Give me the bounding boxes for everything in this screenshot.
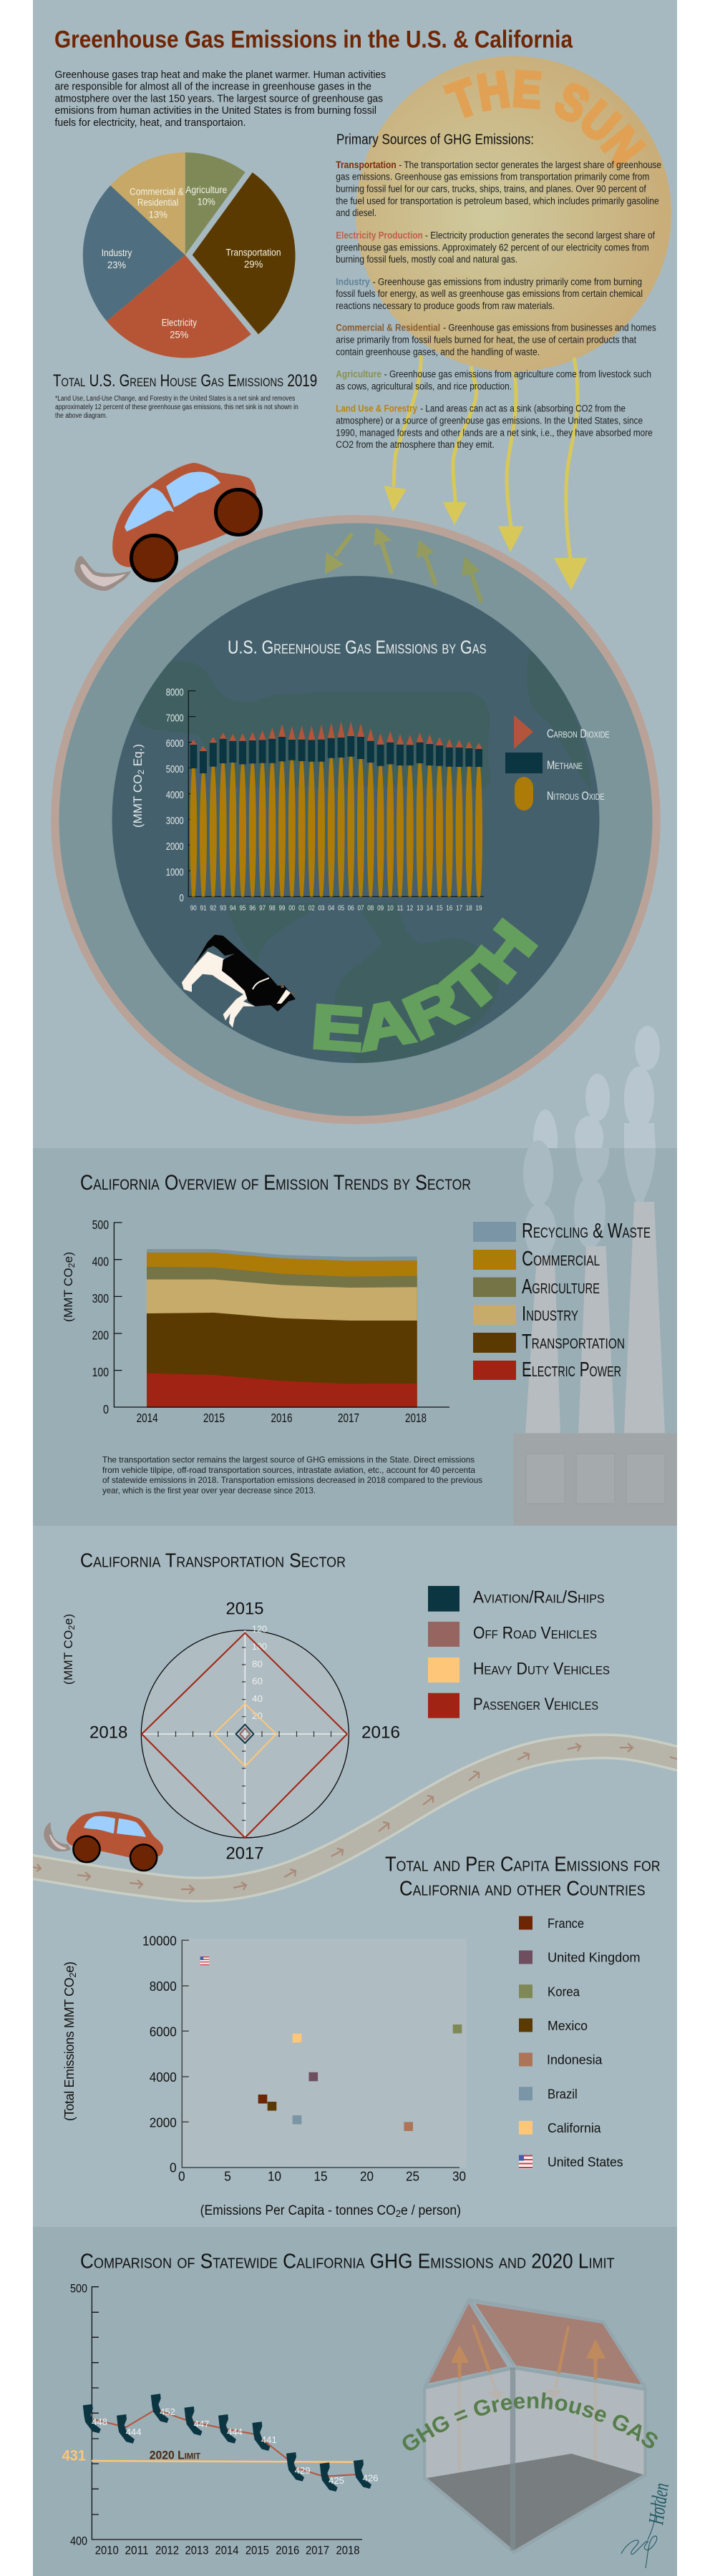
scatter plot: emissions vs per capita	[62, 1934, 467, 2219]
title: Greenhouse Gas Emissions in the U.S. & California	[54, 26, 573, 53]
car wheels	[73, 1836, 100, 1862]
text block: transportation trend: year, which is the first year over year decrease since 2013.	[102, 1485, 316, 1495]
year labels: 2016	[361, 1723, 400, 1742]
axis values: 200	[92, 1328, 109, 1343]
area: transportation	[147, 1313, 417, 1408]
axis values: 2018	[405, 1411, 427, 1425]
axis values: 2015	[203, 1411, 225, 1425]
pie labels: 10%	[198, 196, 215, 207]
text block: commercial and residential source: - Greenhouse gas emissions from businesses and homes	[443, 323, 656, 333]
data values: 444	[126, 2427, 142, 2437]
axes	[92, 2287, 362, 2540]
pie labels: Electricity	[162, 318, 197, 328]
x axis years: 93	[220, 904, 226, 913]
legend: countries: France	[548, 1916, 584, 1931]
radial scale values: 60	[252, 1675, 263, 1687]
heading: california overview: California Overview of Emission Trends by Sector	[80, 1171, 471, 1195]
year labels: 2017	[226, 1843, 263, 1863]
year labels	[89, 1600, 400, 1863]
y axis values: 6000	[166, 738, 184, 750]
continents	[136, 652, 590, 1063]
illustration: earth	[51, 515, 661, 1125]
text block: commercial and residential source: Commercial & Residential	[336, 323, 440, 333]
data values: 441	[261, 2435, 277, 2445]
panel: statewide comparison background	[33, 2227, 677, 2576]
text block: electricity source: - Electricity production generates the second largest share of	[425, 230, 655, 240]
x axis years: 16	[446, 904, 452, 913]
intro text block: fuels for electricity, heat, and transportaion.	[54, 117, 246, 129]
roof	[428, 2303, 507, 2384]
y axis values: 4000	[166, 789, 184, 801]
pie labels: Transportation	[226, 248, 281, 258]
slice: industry	[83, 185, 185, 321]
intro text block: are responsible for almost all of the increase in greenhouse gases in the	[54, 82, 371, 93]
greenhouse gas label: GHG = Greenhouse GAS	[402, 2392, 658, 2451]
x axis years: 17	[456, 904, 462, 913]
text block: industry source: - Greenhouse gas emissions from industry primarily come from burning	[373, 276, 642, 287]
text block: agriculture source	[336, 369, 651, 392]
pie labels: 23%	[107, 260, 126, 270]
axis values: 2016	[276, 2543, 299, 2557]
pie labels: 29%	[244, 259, 263, 270]
legend: sectors	[473, 1220, 651, 1381]
axis values: 500	[92, 1218, 109, 1232]
axis values: 2012	[155, 2543, 179, 2557]
x axis years: 09	[377, 904, 384, 913]
data markers	[200, 1957, 462, 2131]
text block: land use and forestry source: atmosphere) or a source of greenhouse gas emissions. In the United States, since	[336, 415, 643, 426]
text block: land use and forestry source: 1990, managed forests and other lands are a net sink, i.e., they have absorbed more	[336, 427, 653, 438]
car windows	[84, 1816, 115, 1833]
limit value: 431	[62, 2447, 86, 2464]
slice: commercial and residential	[110, 152, 185, 255]
text block: electricity source: greenhouse gas emissions. Approximately 62 percent of our electricity comes from	[336, 242, 649, 253]
axis values	[142, 1934, 466, 2183]
axis values: 6000	[150, 2024, 177, 2039]
y axis label: e)	[62, 1252, 75, 1263]
signature: Holden	[644, 2482, 673, 2527]
illustration: greenhouse	[424, 2300, 646, 2552]
axis values: 2017	[338, 1411, 359, 1425]
heading: total and per capita emissions: Total and Per Capita Emissions for	[385, 1853, 660, 1876]
footnote: *Land Use, Land-Use Change, and Forestry in the United States is a net sink and removes	[55, 395, 295, 403]
radial scale values: 120	[252, 1624, 267, 1635]
illustration: cow	[182, 935, 296, 1028]
radar chart: transportation emissions	[62, 1600, 400, 1863]
legend: sectors: Industry	[522, 1303, 578, 1326]
y axis title: 2	[67, 1972, 78, 1978]
illustration: car on road	[44, 1811, 163, 1871]
axis values: 2000	[150, 2115, 177, 2130]
axis values: 2015	[245, 2543, 269, 2557]
text block: electricity source: Electricity Production	[336, 230, 423, 240]
intro text block: atmostphere over the last 150 years. The largest source of greenhouse gas	[54, 93, 383, 104]
y axis title: (Total Emissions MMT CO	[62, 1977, 77, 2121]
marker: united states flag	[200, 1957, 209, 1965]
legend: sectors: Electric Power	[522, 1358, 621, 1381]
text block: land use and forestry source: CO2 from the atmosphere than they emit.	[336, 439, 495, 450]
slice: agriculture	[185, 152, 245, 255]
axis values: 2014	[215, 2543, 239, 2557]
text block: transportation trend: from vehicle tilpipe, off-road transportation sources, intrastate aviation, etc., account for 40 percenta	[102, 1465, 475, 1475]
heading: statewide comparison: Comparison of Statewide California GHG Emissions and 2020 Limit	[80, 2251, 615, 2273]
signature	[621, 2482, 673, 2568]
text block: transportation source: and diesel.	[336, 207, 376, 218]
text block: land use and forestry source: - Land areas can act as a sink (absorbing CO2 from the	[420, 403, 626, 414]
x axis years: 05	[338, 904, 344, 913]
axis values: 8000	[150, 1979, 177, 1994]
plot background	[182, 1939, 467, 2168]
pie labels: Residential	[137, 197, 178, 207]
x axis years: 10	[387, 904, 394, 913]
text block: transportation trend	[102, 1455, 482, 1495]
text block: commercial and residential source: arise primarily from fossil fuels burned for heat, the use of certain products that	[336, 335, 636, 346]
text block: commercial and residential source	[336, 323, 656, 358]
x axis years: 02	[308, 904, 315, 913]
bars: nitrous oxide	[190, 751, 482, 903]
illustration: the sun	[356, 56, 671, 372]
x axis years: 91	[200, 904, 207, 913]
axis values: 2017	[306, 2543, 329, 2557]
radial scale values: 20	[252, 1710, 263, 1721]
x axis years: 14	[427, 904, 433, 913]
axis values: 15	[313, 2169, 328, 2183]
data values: 447	[193, 2419, 210, 2429]
axis values: 300	[92, 1291, 109, 1306]
radial scale values: 80	[252, 1658, 263, 1670]
x axis years: 92	[210, 904, 216, 913]
illustration: road	[29, 1743, 680, 1894]
x axis years: 15	[437, 904, 443, 913]
earth label: EARTH	[313, 917, 538, 1053]
x axis years: 00	[288, 904, 295, 913]
y axis values: 8000	[166, 686, 184, 698]
legend: countries: Mexico	[548, 2019, 588, 2033]
text block: agriculture source: - Greenhouse gas emissions from agriculture come from livestock such	[384, 369, 651, 380]
axis values: 10	[268, 2169, 281, 2183]
car windows	[166, 472, 220, 507]
y axis label: (MMT CO	[62, 1630, 75, 1685]
x axis years: 07	[358, 904, 364, 913]
slice: transportation	[193, 172, 296, 334]
legend: gases: Carbon Dioxide	[547, 727, 610, 740]
pie labels: Commercial &	[130, 187, 184, 197]
y axis values	[166, 686, 184, 904]
axis values: 100	[92, 1365, 109, 1379]
legend: sectors: Commercial	[522, 1248, 600, 1270]
text block: land use and forestry source	[336, 403, 653, 450]
y axis label: 2	[67, 1625, 77, 1630]
pie chart heading: Total U.S. Green House Gas Emissions 2019	[53, 371, 317, 391]
pie chart: total U.S. emissions by sector	[83, 152, 296, 358]
intro text block: emisions from human activities in the United States is from burning fossil	[54, 105, 376, 117]
radial scale values: 40	[252, 1693, 263, 1704]
y axis label: Eq.)	[131, 744, 145, 770]
car body	[67, 1811, 163, 1858]
radar disc	[141, 1630, 349, 1838]
text block: land use and forestry source: Land Use & Forestry	[336, 403, 417, 414]
text block: transportation source	[336, 160, 661, 218]
exhaust	[74, 556, 131, 591]
x axis years: 19	[475, 904, 482, 913]
arrows: heat rising from earth	[325, 527, 482, 602]
axes	[182, 1940, 459, 2168]
exhaust	[44, 1822, 71, 1851]
axis values: 400	[92, 1255, 109, 1269]
footnote: the above diagram.	[55, 412, 107, 420]
slice: electricity	[107, 255, 251, 358]
legend: countries: United Kingdom	[548, 1951, 641, 1965]
y axis values: 1000	[166, 866, 184, 878]
legend: transportation	[428, 1586, 610, 1718]
sun label: THE SUN	[442, 69, 647, 169]
area chart: emission trends by sector	[62, 1218, 449, 1425]
legend: transportation: Aviation/Rail/Ships	[473, 1588, 605, 1607]
series: off road vehicles	[240, 1728, 250, 1740]
axis values: 500	[70, 2281, 87, 2295]
heat arrows	[451, 2325, 606, 2495]
year labels: 2015	[226, 1600, 263, 1619]
y axis label: (MMT CO	[131, 775, 145, 828]
emissions trend line	[93, 2409, 358, 2477]
y axis label: 2	[136, 770, 146, 775]
pie labels: Agriculture	[185, 185, 227, 195]
pie labels	[102, 185, 281, 340]
legend: transportation: Heavy Duty Vehicles	[473, 1660, 610, 1679]
text block: agriculture source: as cows, agricultural soils, and rice production.	[336, 381, 512, 392]
data values: 426	[362, 2474, 379, 2484]
heading: transportation sector: California Transportation Sector	[80, 1549, 346, 1572]
axis values: 2013	[185, 2543, 209, 2557]
axis values: 2010	[95, 2543, 119, 2557]
text block: transportation source: burning fossil fuel for our cars, trucks, ships, trains, and planes. Over 90 percent of	[336, 184, 646, 195]
california markers	[83, 2394, 371, 2492]
heading: total and per capita emissions	[385, 1853, 660, 1900]
y axis label: e)	[62, 1614, 75, 1625]
y axis label: (MMT CO	[62, 1268, 75, 1322]
smokestacks	[525, 1202, 665, 1434]
limit label: 2020 Limit	[150, 2448, 201, 2462]
axis values: 5	[224, 2169, 231, 2183]
axis values	[70, 2281, 359, 2557]
y axis title: e)	[62, 1962, 77, 1973]
axis values: 0	[170, 2161, 177, 2175]
text block: transportation source: - The transportation sector generates the largest share of greenhouse	[399, 160, 661, 170]
radar axes	[141, 1630, 349, 1838]
axes	[114, 1223, 449, 1407]
legend flag: united states	[519, 2155, 532, 2169]
axes	[188, 691, 484, 896]
year labels: 2018	[89, 1723, 127, 1742]
legend: countries: Korea	[548, 1984, 580, 1999]
area: recycling and waste	[147, 1249, 417, 1408]
area: electric power	[147, 1373, 417, 1408]
legend: countries	[519, 1916, 641, 2170]
text block: industry source: reactions necessary to produce goods from raw materials.	[336, 300, 555, 311]
data values: 448	[92, 2417, 107, 2427]
legend: countries: United States	[548, 2155, 623, 2170]
illustration: factory with smokestacks	[513, 1140, 677, 1525]
legend: gases: Nitrous Oxide	[547, 789, 605, 803]
data values	[92, 2407, 379, 2486]
pie labels: Industry	[102, 248, 132, 258]
radial scale values: 100	[252, 1641, 267, 1652]
intro text block: Greenhouse gases trap heat and make the planet warmer. Human activities	[54, 69, 386, 81]
x axis years: 03	[318, 904, 325, 913]
data values: 452	[160, 2407, 175, 2417]
frame	[424, 2300, 646, 2552]
x axis years: 08	[367, 904, 374, 913]
text block: transportation source: gas emissions. Greenhouse gas emissions from transportation primarily come from	[336, 172, 649, 182]
axis values: 0	[178, 2169, 185, 2183]
x axis years: 18	[466, 904, 472, 913]
legend: sectors: Recycling & Waste	[522, 1220, 651, 1243]
floor	[427, 2454, 643, 2550]
bars: methane	[190, 736, 482, 773]
y axis values: 3000	[166, 815, 184, 827]
text block: industry source: Industry	[336, 276, 370, 287]
legend: gases	[505, 715, 610, 810]
axis values: 2011	[125, 2543, 149, 2557]
x axis years: 01	[298, 904, 305, 913]
panel: transportation and countries background	[33, 1526, 677, 2227]
smoke on upper panel	[533, 1026, 660, 1174]
series: aviation rail ships	[236, 1725, 253, 1743]
x axis years: 99	[279, 904, 286, 913]
car wheels	[216, 489, 261, 535]
y axis values: 2000	[166, 841, 184, 853]
text block: commercial and residential source: contain greenhouse gases, and the handling of waste.	[336, 347, 540, 358]
x axis years: 95	[239, 904, 246, 913]
axis values: 10000	[142, 1934, 177, 1948]
area: commercial	[147, 1253, 417, 1408]
legend: sectors: Agriculture	[522, 1275, 600, 1298]
y axis values: 5000	[166, 763, 184, 775]
x axis years: 96	[249, 904, 256, 913]
x axis years: 11	[397, 904, 404, 913]
x axis years: 94	[230, 904, 236, 913]
radial scale values	[252, 1624, 267, 1721]
panel: sun and sources background	[33, 0, 677, 1149]
axis values	[92, 1218, 427, 1425]
x axis years: 12	[407, 904, 413, 913]
heading: total and per capita emissions: California and other Countries	[399, 1877, 646, 1900]
road arrows	[33, 1743, 677, 1894]
x axis title: (Emissions Per Capita - tonnes CO	[200, 2203, 412, 2218]
x axis years: 97	[259, 904, 266, 913]
factory windows	[526, 1454, 665, 1504]
text block: transportation trend: of statewide emissions in 2018. Transportation emissions decreased in 2018 compared to the previous	[102, 1475, 482, 1485]
axis values: 0	[103, 1402, 109, 1416]
x axis years: 04	[328, 904, 334, 913]
legend: gases: Methane	[547, 758, 583, 772]
data values: 425	[329, 2476, 344, 2486]
text block: agriculture source: Agriculture	[336, 369, 381, 380]
x axis years	[190, 904, 482, 913]
axis values: 2014	[137, 1411, 158, 1425]
car body	[112, 463, 257, 567]
legend: countries: Brazil	[548, 2087, 578, 2101]
heading: primary sources: Primary Sources of GHG Emissions:	[336, 132, 534, 148]
footnote	[55, 395, 298, 420]
smoke plumes	[523, 1140, 656, 1258]
text block: transportation trend: The transportation sector remains the largest source of GHG emissions in the State. Direct emissions	[102, 1455, 475, 1465]
y axis values: 7000	[166, 712, 184, 724]
data values: 444	[227, 2427, 243, 2437]
legend: transportation: Passenger Vehicles	[473, 1695, 598, 1714]
intro text block	[54, 69, 386, 129]
series: passenger vehicles	[142, 1633, 347, 1838]
area: industry	[147, 1279, 417, 1408]
limit line	[92, 2461, 354, 2462]
walls	[424, 2368, 646, 2550]
axis values: 25	[406, 2169, 419, 2183]
text block: electricity source	[336, 230, 655, 265]
x axis title: e / person)	[401, 2203, 461, 2218]
axis values: 30	[452, 2169, 466, 2183]
bars: carbon dioxide	[190, 721, 482, 751]
area: agriculture	[147, 1267, 417, 1408]
y axis values: 0	[179, 892, 184, 904]
x axis years: 98	[269, 904, 276, 913]
footnote: approximately 12 percent of these greenhouse gas emissions, this net sink is not shown in	[55, 403, 298, 411]
legend: transportation: Off Road Vehicles	[473, 1624, 597, 1643]
pie labels: 13%	[149, 209, 167, 220]
x axis years: 90	[190, 904, 197, 913]
x axis years: 06	[348, 904, 354, 913]
arrows: sunlight rays to earth	[384, 355, 588, 590]
text block: electricity source: burning fossil fuels, mostly coal and natural gas.	[336, 254, 517, 265]
axis values: 400	[70, 2535, 87, 2548]
axis values: 2016	[271, 1411, 292, 1425]
pie labels: 25%	[170, 329, 188, 340]
factory building	[513, 1433, 677, 1525]
series: heavy duty vehicles	[214, 1704, 276, 1766]
panel: california sector trends background	[33, 1148, 677, 1526]
x axis title: 2	[396, 2208, 401, 2219]
illustration: car on earth with exhaust	[74, 463, 261, 591]
legend: sectors: Transportation	[522, 1331, 625, 1353]
text block: transportation source: the fuel used for transportation is petroleum based, which includes primarily gasoline	[336, 195, 659, 206]
axis values: 4000	[150, 2070, 177, 2085]
line chart: statewide emissions vs limit	[62, 2281, 379, 2557]
heading: emissions by gas: U.S. Greenhouse Gas Emissions by Gas	[228, 637, 487, 658]
text block: industry source: fossil fuels for energy, as well as greenhouse gas emissions from certain chemical	[336, 288, 643, 299]
axis values: 20	[360, 2169, 374, 2183]
text block: transportation source: Transportation	[336, 160, 397, 170]
y axis label: 2	[67, 1263, 77, 1268]
axis values: 2018	[336, 2543, 359, 2557]
text block: industry source	[336, 276, 643, 311]
data values: 429	[295, 2466, 311, 2476]
legend: countries: California	[548, 2121, 602, 2135]
x axis years: 13	[417, 904, 423, 913]
stacked bar chart: emissions by gas	[131, 686, 484, 913]
legend: countries: Indonesia	[547, 2053, 603, 2067]
